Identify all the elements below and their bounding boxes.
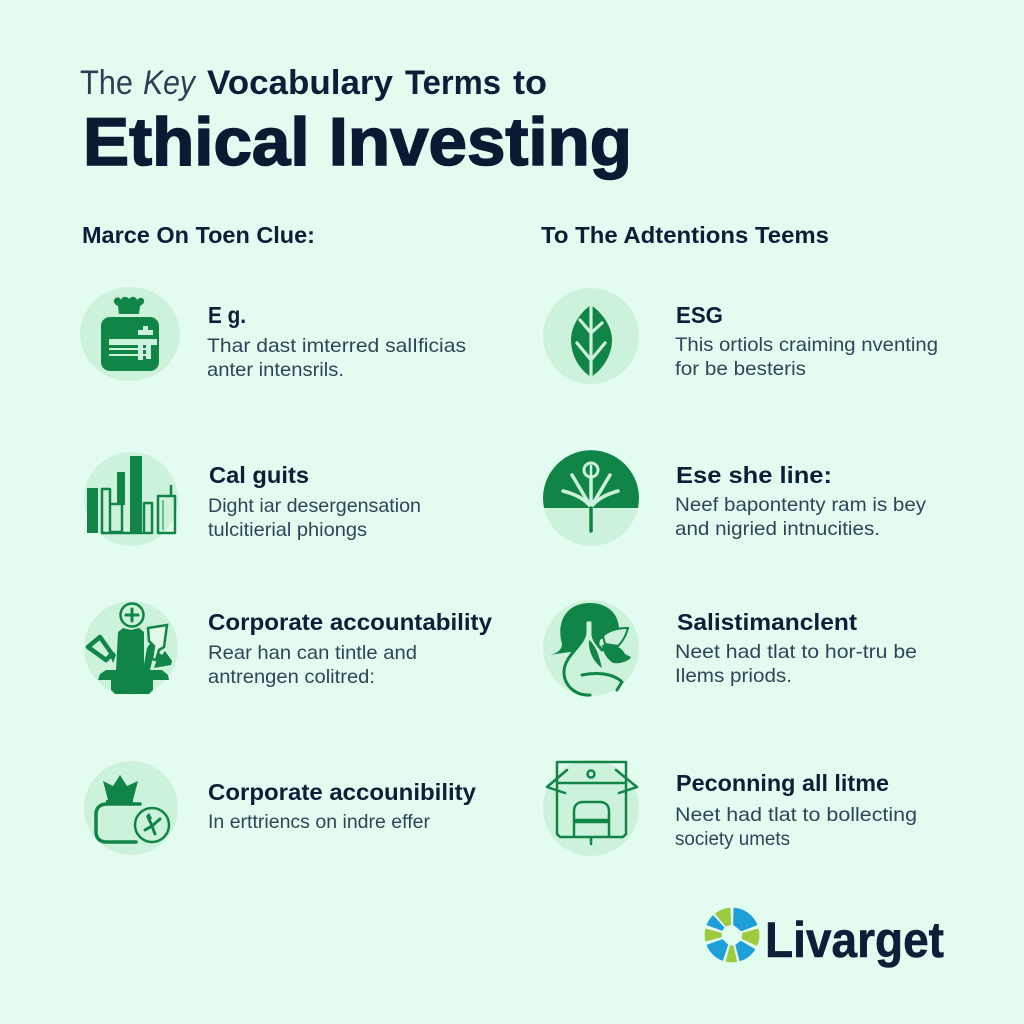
term: E g. bbox=[208, 302, 246, 328]
description: for be besteris bbox=[675, 358, 806, 380]
item: Peconning all litme bbox=[543, 760, 917, 856]
title line 1: Terms bbox=[405, 64, 501, 102]
icon: leaf bbox=[543, 288, 639, 384]
term: ESG bbox=[676, 302, 723, 328]
description: Ilems priods. bbox=[675, 665, 792, 687]
description: Neet had tlat to hor-tru be bbox=[675, 641, 917, 663]
term: Corporate accounibility bbox=[208, 779, 476, 805]
description: This ortiols craiming nventing bbox=[675, 334, 938, 356]
description bbox=[208, 495, 421, 541]
term: Corporate accountability bbox=[208, 609, 492, 635]
pot and stem bbox=[98, 628, 169, 694]
icon: flask and leaves bbox=[543, 600, 639, 696]
term: Salistimanclent bbox=[677, 609, 857, 635]
description: tulcitierial phiongs bbox=[208, 519, 367, 541]
logo bbox=[704, 907, 944, 968]
title line 2: Ethical Investing bbox=[83, 104, 632, 180]
title line 1: Key bbox=[143, 64, 197, 102]
description bbox=[208, 642, 417, 688]
description: society umets bbox=[675, 828, 790, 850]
title line 1 bbox=[80, 64, 547, 102]
term: Peconning all litme bbox=[676, 770, 889, 796]
icon: growth plant with money bbox=[84, 601, 178, 695]
description: Dight iar desergensation bbox=[208, 495, 421, 517]
item: Salistimanclent bbox=[543, 600, 917, 696]
description: anter intensrils. bbox=[207, 359, 344, 381]
term: Cal guits bbox=[209, 462, 309, 488]
title line 1: The bbox=[80, 64, 133, 102]
title line 1: to bbox=[513, 64, 547, 102]
icon: framed building bbox=[543, 760, 639, 856]
description bbox=[675, 641, 917, 687]
item: ESG bbox=[543, 288, 938, 384]
icon: bag with badge bbox=[84, 761, 178, 855]
title bbox=[80, 64, 632, 180]
item: Corporate accountability bbox=[84, 601, 492, 695]
term: Ese she line: bbox=[676, 462, 832, 488]
title line 1: Vocabulary bbox=[207, 64, 393, 102]
item: Ese she line bbox=[543, 450, 926, 546]
description: antrengen colitred: bbox=[208, 666, 375, 688]
left column heading: Marce On Toen Clue: bbox=[82, 222, 315, 248]
description: Thar dast imterred salIficias bbox=[207, 335, 466, 357]
right column heading: To The Adtentions Teems bbox=[541, 222, 829, 248]
description: Rear han can tintle and bbox=[208, 642, 417, 664]
icon: sprouting plant bbox=[543, 450, 639, 546]
description: Neet had tlat to bollecting bbox=[675, 804, 917, 826]
description: Neef bapontenty ram is bey bbox=[675, 494, 926, 516]
icon: money bag bbox=[80, 287, 180, 381]
description bbox=[675, 334, 938, 380]
description bbox=[675, 494, 926, 540]
description: In erttriencs on indre effer bbox=[208, 811, 431, 833]
logo mark bbox=[704, 907, 760, 963]
item: Cal guits bbox=[84, 452, 421, 546]
item: E g. bbox=[80, 287, 466, 381]
description bbox=[207, 335, 466, 381]
item: Corporate accounibility bbox=[84, 761, 476, 855]
logo wordmark: Livarget bbox=[765, 912, 944, 968]
description: and nigried intnucities. bbox=[675, 518, 880, 540]
description bbox=[675, 804, 917, 850]
icon: bar chart city bbox=[84, 452, 178, 546]
